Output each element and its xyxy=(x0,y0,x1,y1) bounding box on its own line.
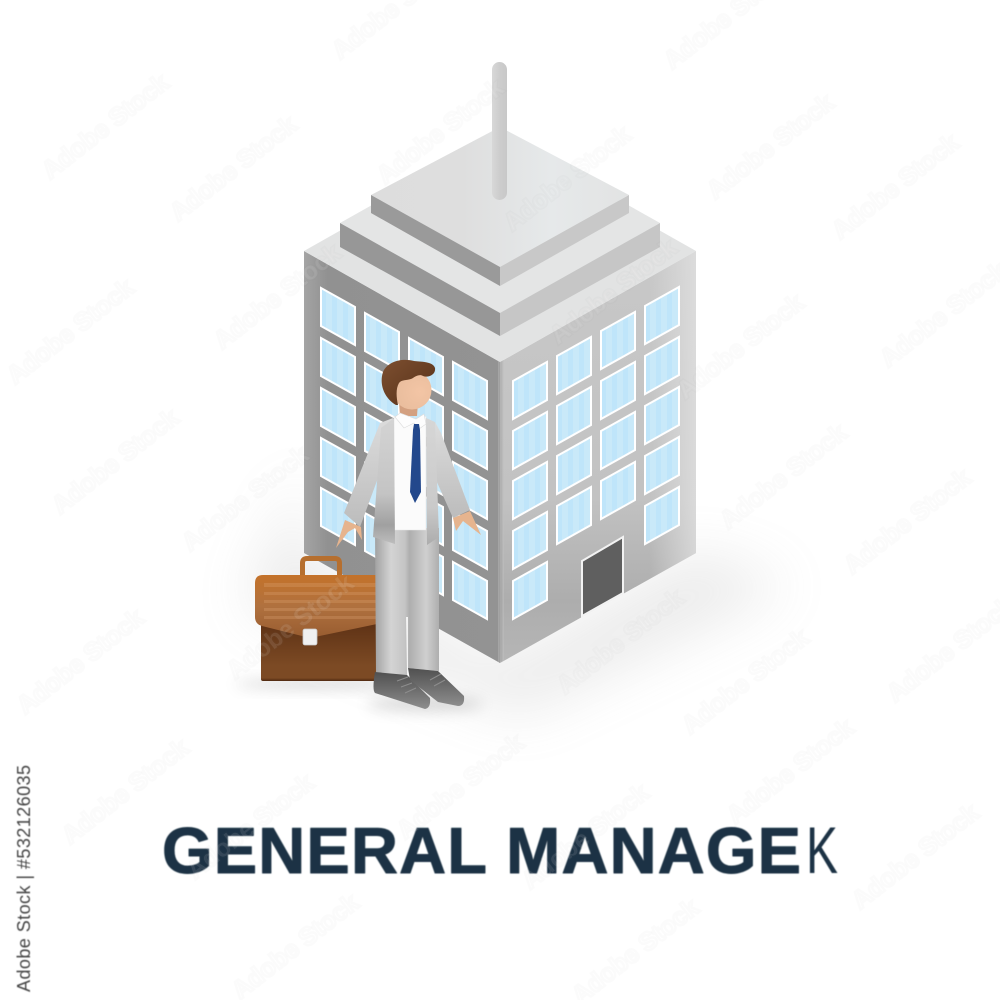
figure: manager xyxy=(336,360,481,709)
watermarks: Adobe Stock xyxy=(714,419,852,535)
watermarks: Adobe Stock xyxy=(371,74,509,190)
title: K xyxy=(806,813,838,887)
watermarks: Adobe Stock xyxy=(36,69,174,185)
building left wall xyxy=(304,251,500,663)
roof third tier xyxy=(371,127,629,286)
building right wall xyxy=(498,251,696,663)
briefcase clasp xyxy=(303,629,317,645)
watermarks: Adobe Stock xyxy=(221,569,359,685)
left shoe xyxy=(374,672,430,709)
hair xyxy=(382,360,435,405)
watermarks: Adobe Stock xyxy=(56,734,194,850)
trousers xyxy=(375,528,439,675)
title: GENERAL MANAGE xyxy=(162,814,801,887)
left arm xyxy=(344,418,393,527)
antenna xyxy=(492,62,507,200)
tie xyxy=(410,424,421,503)
briefcase body xyxy=(261,620,377,681)
stock id caption: Adobe Stock | #532126035 xyxy=(14,765,34,992)
windows: left wall xyxy=(321,288,487,619)
icon: office building xyxy=(304,62,696,663)
watermarks: Adobe Stock xyxy=(1,274,139,390)
left hand xyxy=(336,520,362,548)
watermarks: Adobe Stock xyxy=(164,111,302,227)
right shoe xyxy=(408,668,464,706)
neck xyxy=(399,402,418,416)
collar xyxy=(395,413,426,429)
watermarks: Adobe Stock xyxy=(516,779,654,895)
watermarks: Adobe Stock xyxy=(11,604,149,720)
briefcase handle xyxy=(302,558,340,575)
watermarks: Adobe Stock xyxy=(671,289,809,405)
face xyxy=(392,370,432,410)
right arm xyxy=(435,422,470,518)
flap stripes xyxy=(264,583,377,619)
watermarks: Adobe Stock xyxy=(46,404,184,520)
watermarks: Adobe Stock xyxy=(391,729,529,845)
watermarks: Adobe Stock xyxy=(701,89,839,205)
jacket right panel xyxy=(426,418,439,545)
ground shadow xyxy=(235,470,790,715)
watermarks: Adobe Stock xyxy=(721,714,859,830)
right hand xyxy=(453,511,481,535)
watermarks: Adobe Stock xyxy=(826,129,964,245)
watermarks: Adobe Stock xyxy=(551,584,689,700)
watermarks: Adobe Stock xyxy=(208,239,346,355)
watermarks: Adobe Stock xyxy=(176,441,314,557)
shirt xyxy=(394,416,426,530)
briefcase flap xyxy=(255,575,377,638)
watermarks: Adobe Stock xyxy=(846,799,984,915)
jacket left panel xyxy=(373,418,395,544)
watermarks: Adobe Stock xyxy=(838,464,976,580)
watermarks: Adobe Stock xyxy=(676,624,814,740)
door xyxy=(582,537,623,616)
roof second tier xyxy=(340,133,660,336)
watermarks: Adobe Stock xyxy=(181,769,319,885)
watermarks: Adobe Stock xyxy=(544,234,682,350)
icon: briefcase xyxy=(255,558,377,681)
watermarks: Adobe Stock xyxy=(498,121,636,237)
windows: right wall xyxy=(513,287,679,619)
roof base xyxy=(304,140,696,362)
